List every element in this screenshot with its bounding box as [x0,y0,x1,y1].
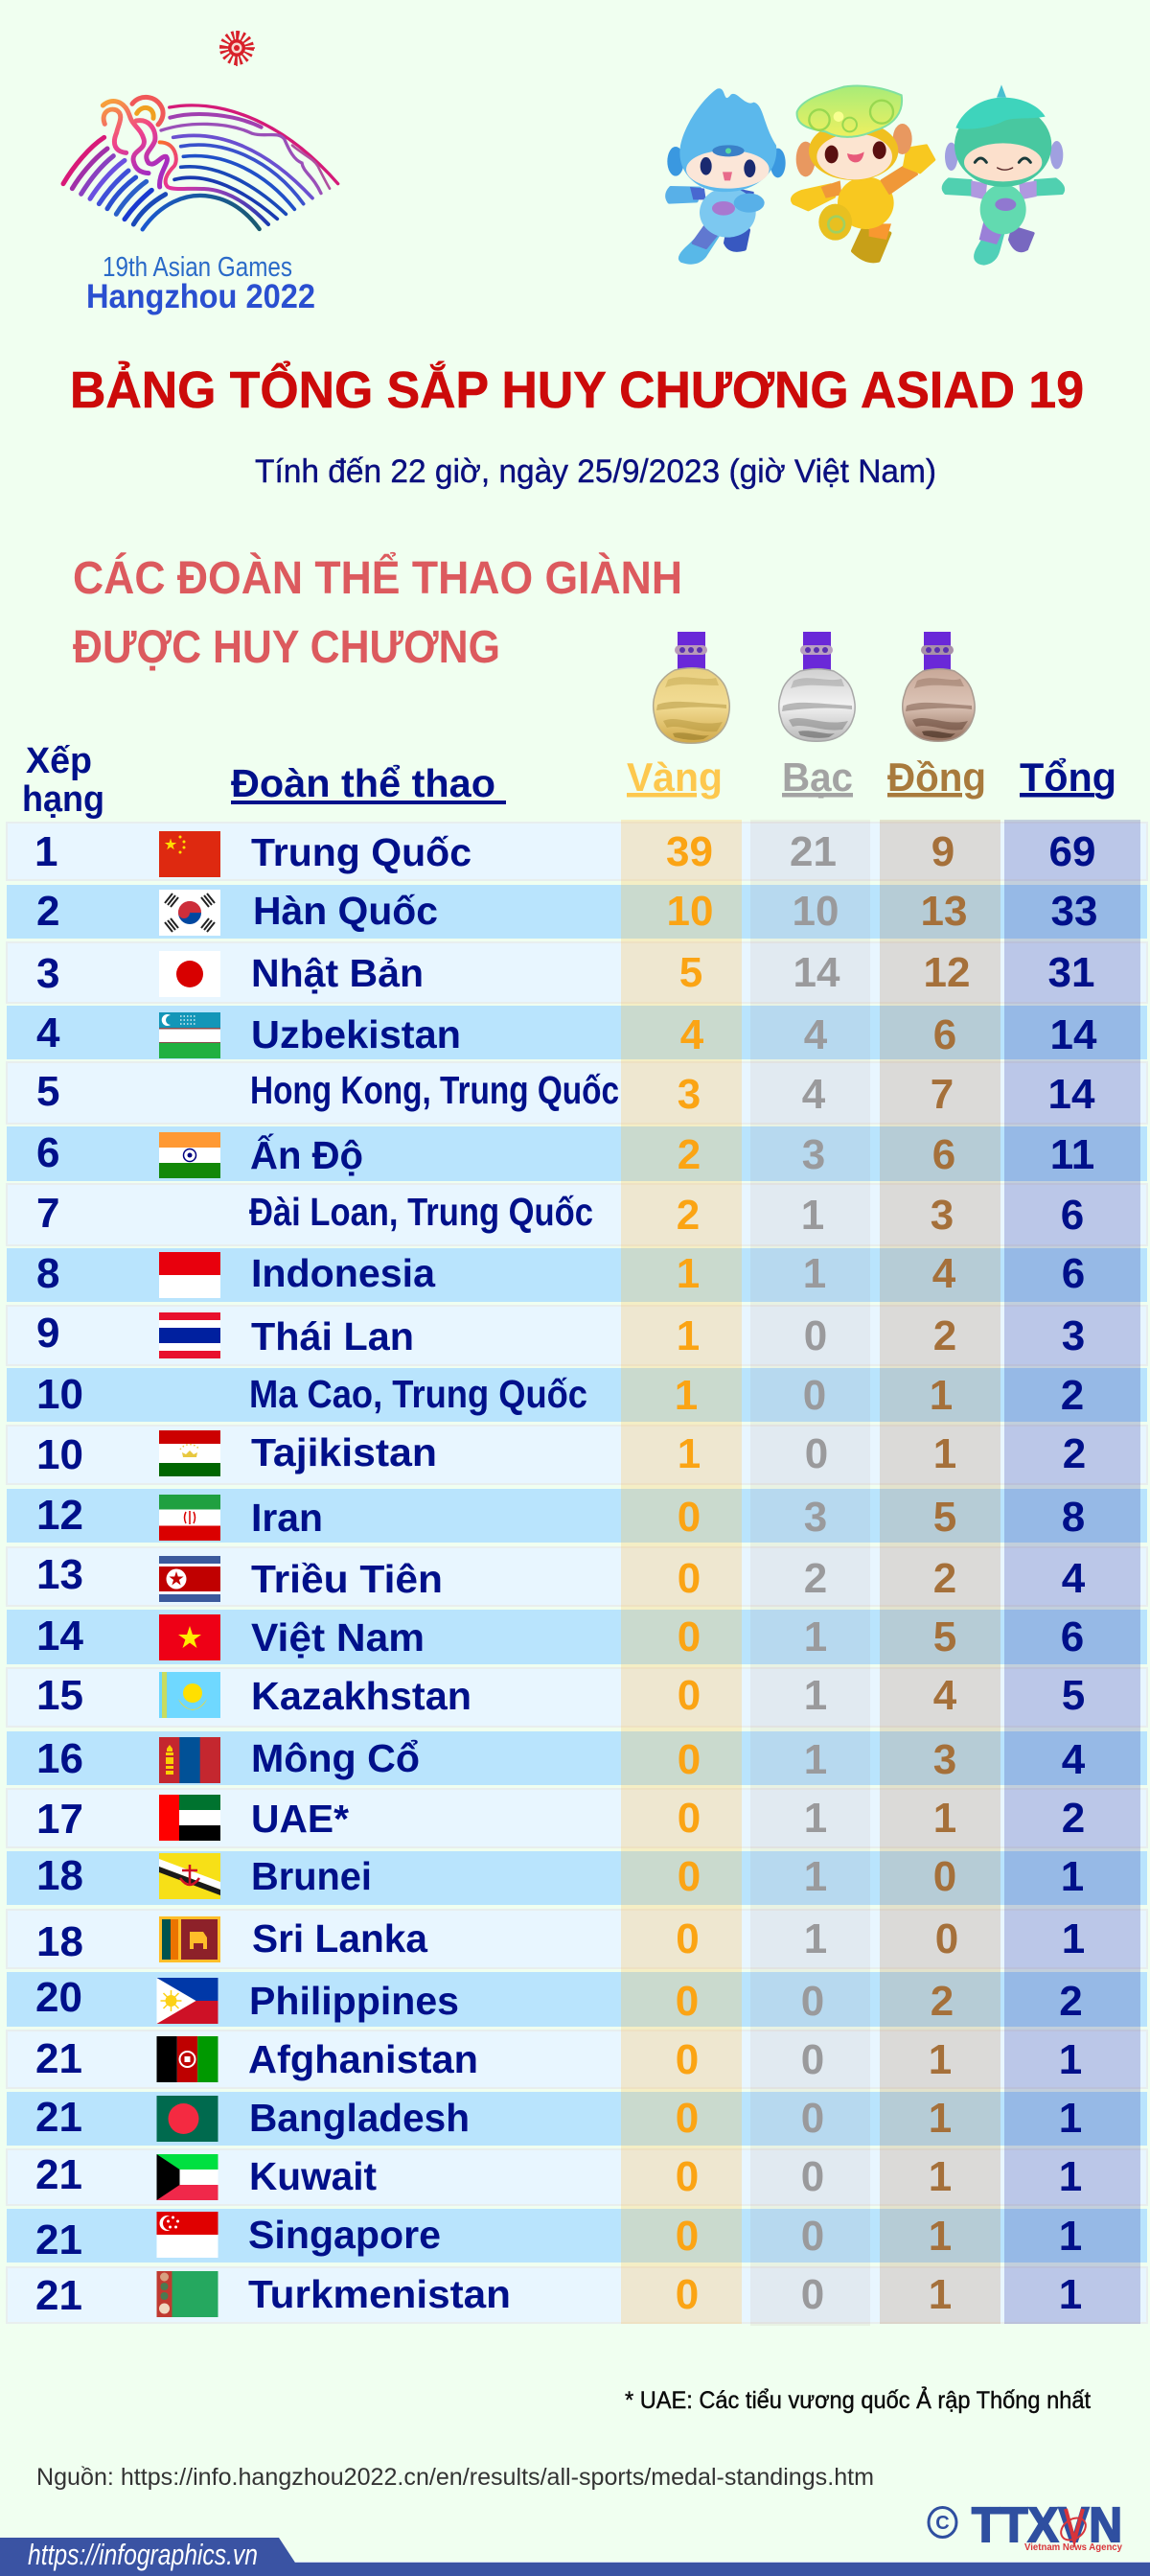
flag: South Korea [159,890,220,936]
row: Brunei: 0 [678,1853,701,1900]
row: Hàn Quốc: 2 [36,888,59,935]
row: Thái Lan: 0 [804,1312,827,1359]
logo: TTXVN [929,2497,1122,2553]
row: Kuwait [35,2151,1082,2200]
flag: Mongolia [159,1737,220,1783]
red globe accent [1057,2509,1090,2544]
flag: Bangladesh [157,2096,218,2142]
heading: medal-winning delegations: CÁC ĐOÀN THỂ THAO GIÀNH [73,552,682,604]
flag: India [159,1132,220,1178]
row: Việt Nam: 1 [804,1613,827,1660]
row: Mông Cổ: 3 [933,1736,956,1783]
row: Ma Cao, Trung Quốc: 1 [675,1372,698,1419]
row: Afghanistan: 1 [1059,2036,1082,2083]
row: Kuwait: Kuwait [249,2154,377,2198]
row: Iran [36,1492,1085,1541]
row: Triều Tiên [36,1551,1086,1602]
flag: Indonesia [159,1252,220,1298]
row: Ma Cao, Trung Quốc: 0 [803,1372,826,1419]
row: Sri Lanka: 0 [935,1915,958,1962]
row: Đài Loan, Trung Quốc: 6 [1061,1192,1084,1239]
row: Hong Kong, Trung Quốc: 4 [802,1071,826,1118]
row: Philippines [35,1974,1083,2025]
row: Việt Nam: Việt Nam [251,1615,425,1659]
flag: UAE [159,1795,220,1841]
row: Iran: 8 [1062,1494,1085,1541]
row: Triều Tiên: 0 [678,1555,701,1602]
row: Iran: 5 [933,1494,956,1541]
row: Sri Lanka [36,1915,1085,1965]
row: UAE*: 0 [678,1795,701,1842]
row: Uzbekistan: 4 [36,1010,60,1056]
row: Singapore: Singapore [248,2213,441,2257]
row: Turkmenistan: 21 [35,2272,82,2319]
row: Đài Loan, Trung Quốc [36,1190,1084,1239]
row: Bangladesh: 0 [676,2095,699,2142]
row: UAE*: 1 [804,1795,827,1842]
row: Uzbekistan: 4 [680,1011,704,1058]
flag: Vietnam [159,1614,220,1660]
logo text line 1: 19th Asian Games [103,252,292,283]
row: Trung Quốc [34,828,1095,877]
row: Bangladesh: 0 [801,2095,824,2142]
header: silver: Bạc [782,754,853,800]
row: Ấn Độ: Ấn Độ [250,1133,363,1177]
table row backgrounds [7,823,1147,2323]
row: Kazakhstan: 0 [678,1672,701,1719]
flag: Uzbekistan [159,1012,220,1058]
row: Sri Lanka: 0 [676,1915,700,1962]
flag: Turkmenistan [157,2271,218,2317]
logo: Hangzhou 2022 Asian Games [63,97,338,315]
row: Nhật Bản: 31 [1048,949,1094,996]
row: Trung Quốc: 1 [34,828,58,875]
row: Việt Nam [36,1613,1084,1660]
icon: red sun emblem [219,31,255,66]
icon: bronze medal [903,632,975,741]
header: total: Tổng [1020,754,1116,800]
footnote: UAE: * UAE: Các tiểu vương quốc Ả rập Thống nhất [625,2385,1091,2414]
row: Nhật Bản: 3 [36,950,59,997]
icon: silver medal [779,632,855,741]
row: Việt Nam: 6 [1061,1613,1084,1660]
row: Singapore: 21 [35,2216,82,2263]
row: Hàn Quốc [36,888,1097,936]
footer url: https://infographics.vn [28,2538,258,2571]
row: Ấn Độ: 11 [1050,1131,1094,1178]
row: Trung Quốc: 69 [1049,828,1095,875]
row: Tajikistan [36,1430,1086,1478]
row: Sri Lanka: 1 [1062,1915,1085,1962]
row: Ấn Độ [36,1129,1094,1178]
row: Kuwait: 0 [801,2153,824,2200]
title: BẢNG TỔNG SẮP HUY CHƯƠNG ASIAD 19 [70,360,1084,419]
row: Indonesia: 1 [677,1250,700,1297]
row: Singapore: 0 [676,2213,699,2260]
column overlays [621,820,1140,2326]
heading: medal-winning delegations: ĐƯỢC HUY CHƯƠNG [73,622,500,673]
row: Hàn Quốc: 10 [667,888,713,935]
header: rank: hạng [22,779,104,820]
row: Trung Quốc: 21 [790,828,837,875]
row: Bangladesh: 1 [929,2095,952,2142]
row: Bangladesh: 21 [35,2094,82,2141]
row: Sri Lanka: Sri Lanka [252,1916,428,1961]
row: UAE*: UAE* [251,1797,349,1841]
row: Kazakhstan: Kazakhstan [251,1674,472,1718]
header: delegation: Đoàn thể thao [231,761,495,805]
flag: Afghanistan [157,2036,218,2082]
row: Nhật Bản [36,949,1094,997]
row: Đài Loan, Trung Quốc: 7 [36,1190,59,1237]
row: Iran: 0 [678,1494,701,1541]
row: Thái Lan: Thái Lan [251,1314,414,1358]
row: Ma Cao, Trung Quốc: 1 [930,1372,953,1419]
mascots [667,84,1064,264]
row: Triều Tiên: Triều Tiên [251,1557,443,1601]
row: Tajikistan: 0 [805,1430,828,1477]
row: Sri Lanka: 18 [36,1918,83,1965]
flag: Brunei [159,1853,220,1899]
mascot: yellow [793,86,934,261]
row: UAE* [36,1795,1085,1843]
subtitle: Tính đến 22 giờ, ngày 25/9/2023 (giờ Việt Nam) [255,453,936,490]
row: Brunei: 1 [804,1853,827,1900]
row: Philippines: 20 [35,1974,82,2021]
header: rank [22,741,104,820]
row: Afghanistan [35,2035,1082,2083]
header: rank: Xếp [26,741,92,781]
row: Brunei: 0 [933,1853,956,1900]
row: Việt Nam: 0 [678,1613,701,1660]
row: Trung Quốc: 9 [932,828,954,875]
row: Uzbekistan: Uzbekistan [251,1012,461,1056]
row: Thái Lan: 2 [933,1312,956,1359]
row: Mông Cổ: 16 [36,1735,83,1782]
row: Ấn Độ: 6 [932,1131,955,1178]
row: Đài Loan, Trung Quốc: 1 [801,1192,824,1239]
logo mark [63,97,338,229]
row: Hong Kong, Trung Quốc [36,1068,1095,1118]
flag: Sri Lanka [159,1916,220,1962]
row: Trung Quốc: Trung Quốc [251,830,472,874]
row: Philippines: 2 [931,1978,954,2025]
row: Singapore [35,2212,1082,2263]
row: Indonesia: 4 [932,1250,956,1297]
copyright mark [929,2508,956,2537]
row: Iran: 12 [36,1492,83,1539]
row: UAE*: 2 [1062,1795,1085,1842]
row: Afghanistan: 0 [801,2036,824,2083]
row: Afghanistan: Afghanistan [248,2037,478,2081]
row: Kazakhstan: 5 [1062,1672,1085,1719]
row: Indonesia [36,1250,1085,1298]
table rows [34,828,1097,2319]
row: Bangladesh [35,2094,1082,2142]
row: Nhật Bản: 12 [924,949,970,996]
row: Thái Lan [36,1310,1085,1359]
header: bronze: Đồng [887,754,986,800]
row: Singapore: 1 [929,2213,952,2260]
row: Mông Cổ [36,1735,1086,1783]
row: Brunei: Brunei [251,1854,372,1898]
row: Philippines: 2 [1059,1978,1083,2025]
row: Indonesia: Indonesia [251,1251,436,1295]
row: Bangladesh: Bangladesh [249,2096,470,2140]
copyright mark: C [935,2513,950,2534]
row: Philippines: Philippines [249,1979,459,2023]
row: Ma Cao, Trung Quốc: Ma Cao, Trung Quốc [249,1372,587,1416]
flag: Kuwait [157,2154,218,2200]
row: Thái Lan: 1 [677,1312,700,1359]
row: Ấn Độ: 2 [678,1131,701,1178]
row: Ma Cao, Trung Quốc: 10 [36,1371,83,1418]
row: Mông Cổ: 4 [1062,1736,1086,1783]
row: Kazakhstan: 4 [933,1672,957,1719]
row: Singapore: 1 [1059,2213,1082,2260]
row: Uzbekistan: 6 [933,1011,956,1058]
row: Afghanistan: 0 [676,2036,699,2083]
row: Brunei [36,1852,1084,1900]
row: Trung Quốc: 39 [666,828,713,875]
flag: North Korea [159,1556,220,1602]
row: Singapore: 0 [801,2213,824,2260]
row: Bangladesh: 1 [1059,2095,1082,2142]
row: Nhật Bản: 14 [794,949,840,996]
row: Hong Kong, Trung Quốc: 3 [678,1071,701,1118]
table header [22,741,1116,820]
row: Turkmenistan: 0 [801,2271,824,2318]
row: Indonesia: 1 [803,1250,826,1297]
row: Philippines: 0 [676,1978,699,2025]
flag: Japan [159,951,220,997]
row: Hong Kong, Trung Quốc: 7 [931,1071,954,1118]
row: Hong Kong, Trung Quốc: 14 [1048,1071,1095,1118]
row: Kuwait: 0 [676,2153,699,2200]
flag: Philippines [157,1978,218,2024]
flag: Tajikistan [159,1430,220,1476]
row: Ma Cao, Trung Quốc: 2 [1061,1372,1084,1419]
row: Kazakhstan: 15 [36,1672,83,1719]
row: Mông Cổ: 1 [804,1736,827,1783]
flag: Iran [159,1495,220,1541]
row: Đài Loan, Trung Quốc: Đài Loan, Trung Quốc [249,1190,593,1234]
row: Brunei: 1 [1061,1853,1084,1900]
row: Hàn Quốc: Hàn Quốc [253,889,438,933]
row: UAE*: 1 [933,1795,956,1842]
row: Mông Cổ: Mông Cổ [251,1736,420,1780]
row: Hàn Quốc: 13 [921,888,967,935]
row: Việt Nam: 14 [36,1613,83,1659]
row: Đài Loan, Trung Quốc: 3 [931,1192,954,1239]
row: Kazakhstan: 1 [804,1672,827,1719]
row: Turkmenistan: 0 [676,2271,699,2318]
row: Afghanistan: 1 [929,2036,952,2083]
row: Brunei: 18 [36,1852,83,1899]
row: Hong Kong, Trung Quốc: 5 [36,1068,59,1115]
row: Sri Lanka: 1 [804,1915,827,1962]
row: Nhật Bản: 5 [679,949,702,996]
flag: Thailand [159,1312,220,1358]
row: Ấn Độ: 3 [802,1131,825,1178]
row: Hàn Quốc: 10 [793,888,839,935]
row: Turkmenistan: Turkmenistan [248,2272,511,2316]
row: Đài Loan, Trung Quốc: 2 [677,1192,700,1239]
row: Hàn Quốc: 33 [1051,888,1097,935]
row: Tajikistan: 1 [933,1430,956,1477]
row: Turkmenistan [35,2271,1082,2319]
footer bar [0,2538,1150,2576]
row: Ấn Độ: 6 [36,1129,59,1176]
logo text line 2: Hangzhou 2022 [86,278,315,315]
row: Uzbekistan: 14 [1050,1011,1097,1058]
header: gold: Vàng [627,754,723,800]
row: Tajikistan: 1 [678,1430,701,1477]
source: Nguồn: https://info.hangzhou2022.cn/en/results/all-sports/medal-standings.htm [36,2464,874,2491]
row: Tajikistan: 10 [36,1431,83,1478]
row: Uzbekistan: 4 [804,1011,828,1058]
row: Indonesia: 8 [36,1250,59,1297]
row: Mông Cổ: 0 [678,1736,701,1783]
row: Kazakhstan [36,1672,1085,1719]
flag: Singapore [157,2212,218,2258]
heading: medal-winning delegations [73,552,682,673]
row: Afghanistan: 21 [35,2035,82,2082]
row: Tajikistan: 2 [1063,1430,1086,1477]
row: Thái Lan: 3 [1062,1312,1085,1359]
row: Turkmenistan: 1 [929,2271,952,2318]
row: Triều Tiên: 2 [933,1555,956,1602]
row: Ma Cao, Trung Quốc [36,1371,1084,1419]
row: Kuwait: 21 [35,2151,82,2198]
row: Uzbekistan [36,1010,1097,1058]
row: Kuwait: 1 [929,2153,952,2200]
row: Nhật Bản: Nhật Bản [251,951,424,995]
icon: gold medal [654,632,729,743]
wordmark: TTXVN [972,2497,1122,2552]
row: Tajikistan: Tajikistan [251,1430,437,1474]
flag: Kazakhstan [159,1672,220,1718]
row: Iran: 3 [804,1494,827,1541]
row: Triều Tiên: 2 [804,1555,827,1602]
mascot: green [943,84,1064,264]
row: Iran: Iran [251,1496,323,1540]
row: Triều Tiên: 13 [36,1551,83,1598]
row: Hong Kong, Trung Quốc: Hong Kong, Trung Quốc [250,1068,619,1112]
row: UAE*: 17 [36,1796,83,1843]
agency name: Vietnam News Agency [1024,2542,1122,2553]
row: Triều Tiên: 4 [1062,1555,1086,1602]
row: Indonesia: 6 [1062,1250,1085,1297]
row: Thái Lan: 9 [36,1310,59,1357]
row: Việt Nam: 5 [933,1613,956,1660]
flag: China [159,831,220,877]
mascot: blue [667,88,786,262]
row: Kuwait: 1 [1059,2153,1082,2200]
row: Turkmenistan: 1 [1059,2271,1082,2318]
row: Philippines: 0 [801,1978,824,2025]
